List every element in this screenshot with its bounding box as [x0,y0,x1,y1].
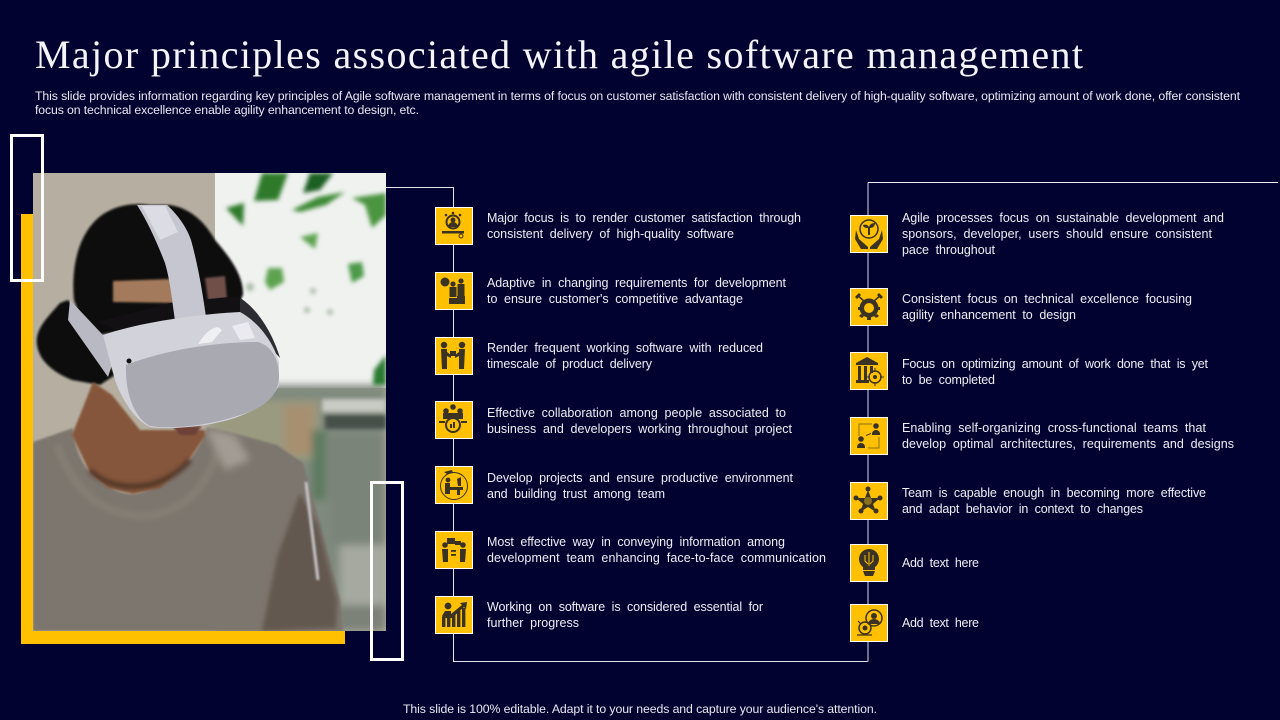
mouth [172,426,202,435]
text: Adaptive in changing requirements for development [487,276,787,290]
icon: customer on platform [436,208,472,244]
text [487,406,793,436]
white bracket top-left [12,136,42,280]
text: Consistent focus on technical excellence focusing [902,292,1192,306]
text [487,341,763,371]
subtitle description: focus on technical excellence enable agility enhancement to design, etc. [35,103,419,117]
text: development team enhancing face-to-face communication [487,551,826,565]
text: sponsors, developer, users should ensure consistent [902,227,1213,241]
text: consistent delivery of high-quality software [487,227,734,241]
text [487,600,763,630]
text: Major focus is to render customer satisfaction through [487,211,801,225]
icon: light bulb gear [850,544,888,582]
text: to be completed [902,373,995,387]
text: Team is capable enough in becoming more effective [902,486,1206,500]
item: collaboration [436,402,793,438]
window foliage [226,173,386,385]
yellow L-shaped frame [21,214,345,644]
item: sustainable development [850,211,1224,257]
text [902,211,1224,257]
text: Render frequent working software with reduced [487,341,763,355]
left column list [436,208,826,634]
text: timescale of product delivery [487,357,653,371]
forehead skin [113,279,176,303]
text [487,535,826,565]
right column list [850,211,1234,642]
connector line right [868,182,1278,662]
item: conveying information [436,532,826,568]
icon: people on podium [436,272,472,310]
icon: gear with person [850,604,888,642]
footer note: This slide is 100% editable. Adapt it to your needs and capture your audience's attention. [403,702,877,716]
text: pace throughout [902,243,996,257]
text [487,211,801,241]
text: Add text here [902,556,979,570]
icon: hands holding plant [850,216,888,252]
item: changing requirements [436,272,787,310]
text: Effective collaboration among people associated to [487,406,786,420]
item: productive environment [436,466,794,504]
icon: star network [850,482,888,520]
text: and building trust among team [487,487,665,501]
icon: two people exchanging package [436,338,472,374]
item: customer satisfaction [436,208,801,244]
connector line left [386,188,868,662]
text [902,357,1209,387]
subtitle description [35,89,1241,117]
neck [72,382,205,494]
text: Enabling self-organizing cross-functional teams that [902,421,1207,435]
subtitle description: This slide provides information regarding key principles of Agile software management in terms of focus on customer satisfaction with consistent delivery of high-quality software, optimizing amount of work done, offer consistent [35,89,1241,103]
white bracket bottom-right [372,482,402,660]
text: Add text here [902,616,979,630]
headset strap and body [120,296,242,330]
text [902,421,1234,451]
text: Working on software is considered essential for [487,600,763,614]
icon: person with rising chart [436,596,472,634]
text: and adapt behavior in context to changes [902,502,1143,516]
item: placeholder one [850,544,979,582]
item: capable team [850,482,1206,520]
text: Most effective way in conveying information among [487,535,785,549]
photo: person wearing VR headset [33,173,386,631]
text: business and developers working throughout project [487,422,793,436]
text [902,486,1206,516]
text: to ensure customer's competitive advantage [487,292,743,306]
item: technical excellence [850,288,1192,326]
item: frequent software [436,338,763,374]
item: optimizing work [850,352,1209,390]
text: develop optimal architectures, requirements and designs [902,437,1234,451]
text [487,276,787,306]
text: Focus on optimizing amount of work done that is yet [902,357,1209,371]
sweater [33,427,343,631]
text: agility enhancement to design [902,308,1076,322]
icon: gear with tools [850,288,888,326]
text [902,292,1192,322]
item: placeholder two [850,604,979,642]
text: Agile processes focus on sustainable development and [902,211,1224,225]
icon: bank with target [850,352,888,390]
title: Major principles associated with agile software management [35,32,1083,77]
icon: team circle [436,402,472,438]
icon: two people talking [436,532,472,568]
icon: two people connected [850,418,888,454]
item: self-organizing teams [850,418,1234,454]
text: Develop projects and ensure productive environment [487,471,794,485]
item: working software [436,596,763,634]
hair [37,204,243,385]
icon: person at desk in circle [436,466,472,504]
text [487,471,794,501]
text: further progress [487,616,579,630]
